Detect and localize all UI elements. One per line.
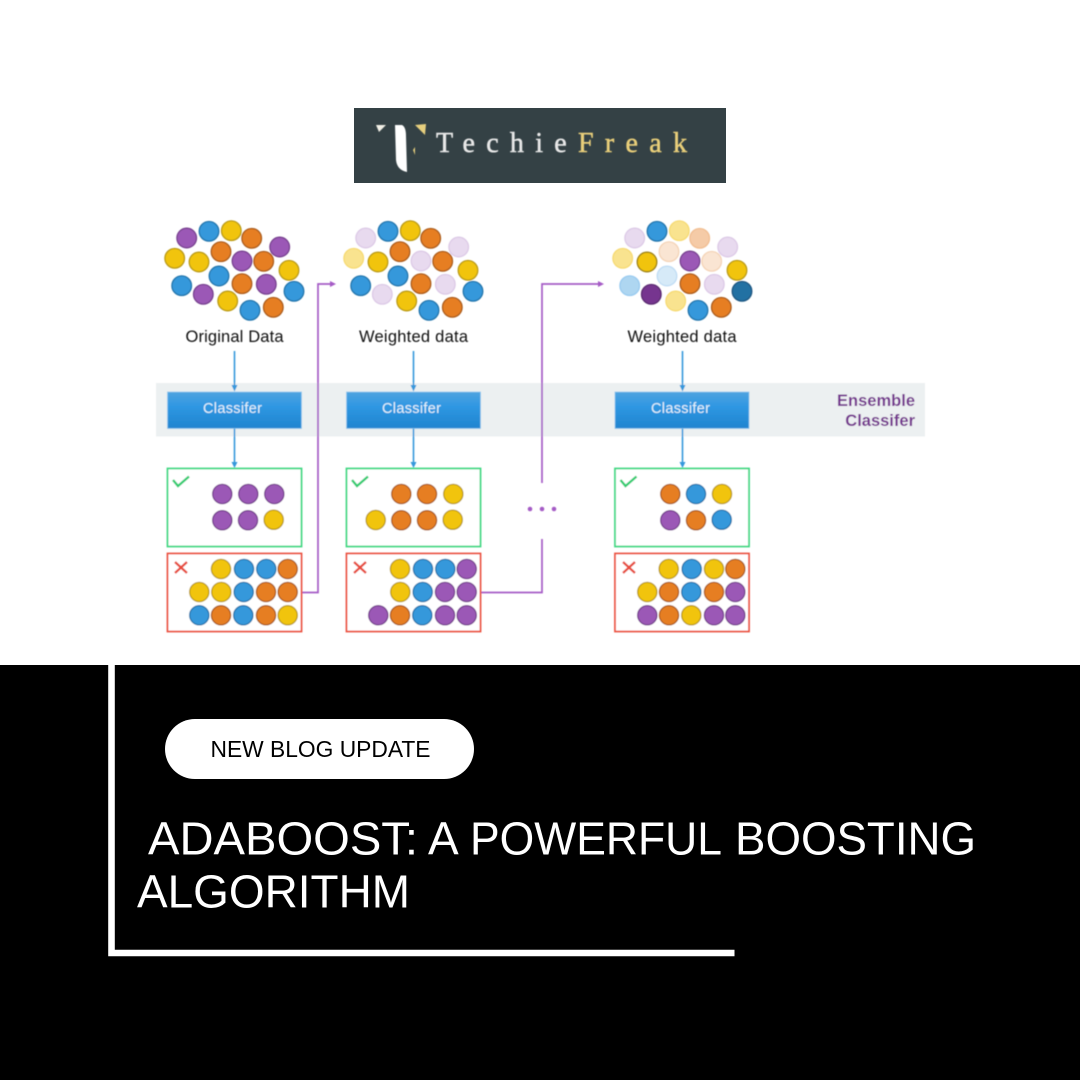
icon: cross xyxy=(354,562,366,573)
arrow: purple feedback 2 xyxy=(481,281,604,592)
cluster: weighted data 2 xyxy=(613,221,752,320)
icon: cross xyxy=(175,562,187,573)
panel: errors 2 xyxy=(346,554,480,632)
panel: correct results 1 xyxy=(168,468,302,546)
title: ADABOOST: xyxy=(148,812,418,864)
classifier box 2 xyxy=(346,392,480,428)
classifier box 3 xyxy=(615,392,749,428)
logo wordmark: Techie Freak xyxy=(436,128,687,159)
title: BOOSTING xyxy=(735,812,976,864)
ellipsis dots xyxy=(528,507,556,511)
cluster: original data xyxy=(165,221,304,320)
title: A xyxy=(428,812,459,864)
badge: new blog update: NEW BLOG UPDATE xyxy=(210,736,430,762)
badge: new blog update xyxy=(165,719,474,779)
arrow: purple feedback 1 xyxy=(302,281,336,592)
classifier box 1 xyxy=(168,392,302,428)
panel: correct results 3 xyxy=(615,468,749,546)
arrows: blue data-to-classifier connectors xyxy=(232,351,686,468)
label: weighted data 1: Weighted data xyxy=(359,328,469,346)
label: ensemble classifier: Classifer xyxy=(845,412,916,430)
band: ensemble classifier xyxy=(156,383,925,436)
label: weighted data 2: Weighted data xyxy=(628,328,737,346)
classifier box 3: Classifer xyxy=(651,401,710,417)
cluster: weighted data 1 xyxy=(344,221,483,320)
title xyxy=(137,812,976,918)
icon: check xyxy=(173,476,189,486)
title: POWERFUL xyxy=(470,812,722,864)
label: original data: Original Data xyxy=(186,328,284,346)
panel: errors 1 xyxy=(168,554,302,632)
icon: check xyxy=(620,476,636,486)
icon: logo monogram xyxy=(376,124,426,172)
classifier box 2: Classifer xyxy=(382,401,441,417)
frame: white L-shaped line xyxy=(112,665,734,953)
panel: errors 3 xyxy=(615,554,749,632)
icon: cross xyxy=(623,562,635,573)
icon: check xyxy=(352,476,368,486)
classifier box 1: Classifer xyxy=(203,401,262,417)
panel: correct results 2 xyxy=(346,468,480,546)
diagram: AdaBoost ensemble flow xyxy=(156,221,925,632)
label: ensemble classifier: Ensemble xyxy=(837,392,915,410)
title: ALGORITHM xyxy=(137,866,410,918)
panel: black footer xyxy=(0,665,1080,1080)
logo: TechieFreak xyxy=(354,108,726,183)
